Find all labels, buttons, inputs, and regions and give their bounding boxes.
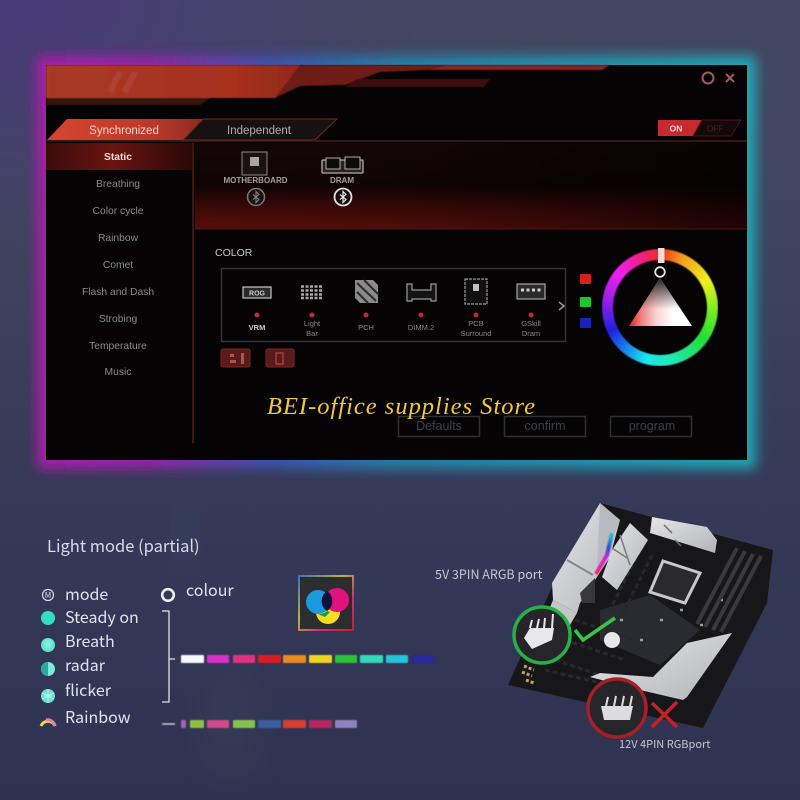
zone: vrm [243, 287, 271, 332]
cross mark [652, 702, 677, 727]
tab: synchronized [47, 119, 203, 140]
shroud dark wedge [580, 578, 595, 603]
small red buttons [221, 349, 294, 367]
static colour strip [181, 655, 434, 663]
zone: pcb surround: PCB [468, 319, 484, 328]
zone: pcb surround [461, 279, 491, 338]
colour legend: colour [186, 577, 234, 601]
icon: motherboard: MOTHERBOARD [224, 176, 288, 185]
sidebar mode list: Flash and Dash [82, 287, 154, 298]
color wheel [602, 248, 718, 366]
action buttons: Defaults [416, 419, 462, 433]
legend item: radar [41, 652, 106, 676]
zone: pch [355, 280, 378, 332]
zone: pch: PCH [358, 323, 374, 332]
zone: vrm: ROG [249, 290, 266, 298]
chipset heatsink [590, 633, 732, 700]
zone: light bar: Bar [306, 329, 318, 338]
sidebar mode list: Breathing [96, 179, 140, 190]
arrow: next [559, 302, 564, 310]
zone: light bar: Light [304, 319, 321, 328]
icon: colour mixing logo [299, 576, 353, 630]
colour legend [162, 577, 234, 601]
action buttons: confirm [525, 419, 565, 433]
sidebar mode list: Temperature [89, 341, 147, 352]
legend item: rainbow: Rainbow [65, 704, 131, 728]
color zone selector [222, 268, 566, 342]
color triangle [629, 278, 692, 326]
tab: independent: Independent [227, 125, 292, 137]
icon: dram [322, 157, 363, 206]
legend item: flicker: flicker [65, 677, 112, 701]
zone: gskill dram: GSkill [521, 319, 541, 328]
shroud foot [548, 600, 577, 625]
zone: light bar [301, 286, 322, 338]
legend item: radar: radar [65, 652, 106, 676]
bracket [162, 611, 175, 702]
zone: gskill dram [517, 284, 545, 338]
rgb glow behind screen [37, 56, 756, 469]
sidebar mode list: Comet [103, 260, 133, 271]
green callout: argb port [514, 607, 570, 663]
on off toggle: ON [670, 124, 682, 134]
legend item: flicker [41, 677, 112, 703]
icon: dram: DRAM [330, 176, 354, 185]
legend item: breath: Breath [65, 628, 115, 652]
legend item: breath [41, 628, 115, 652]
action buttons: program [629, 419, 675, 433]
ram slots [697, 548, 761, 632]
device panel [195, 143, 747, 229]
software screen panel [46, 65, 747, 460]
sidebar mode list [46, 143, 192, 378]
zone: vrm: VRM [249, 323, 265, 332]
vrm heatsink [602, 523, 648, 590]
legend item: mode: M [45, 590, 51, 601]
legend item: steady on: Steady on [65, 604, 139, 628]
rgb channel squares [580, 274, 591, 328]
tab: independent [183, 119, 337, 140]
io contacts [522, 666, 534, 683]
motherboard illustration [508, 503, 773, 737]
io shroud [552, 503, 620, 613]
on off toggle: OFF [707, 124, 723, 134]
sidebar mode list: Music [105, 367, 131, 378]
top red banner [46, 65, 610, 105]
zone: dimm.2 [407, 284, 436, 332]
sidebar mode list: Color cycle [93, 206, 144, 217]
label: rgb port: 12V 4PIN RGBport [619, 736, 710, 752]
window refresh and close icons [702, 72, 734, 84]
board body [508, 503, 773, 728]
rainbow colour strip [162, 720, 357, 728]
sidebar mode list: Static [104, 152, 132, 163]
zone: gskill dram: Dram [522, 329, 540, 338]
zone: dimm.2: DIMM.2 [408, 323, 434, 332]
red callout: rgb port [588, 679, 646, 737]
rgb light strip [596, 533, 612, 574]
zone: pcb surround: Surround [461, 329, 491, 338]
sidebar mode list: Strobing [99, 314, 137, 325]
heading: light mode: Light mode (partial) [47, 533, 200, 557]
sidebar mode list: Rainbow [98, 233, 139, 244]
color label: COLOR [215, 247, 253, 259]
legend item: mode: mode [65, 581, 108, 605]
label: argb port: 5V 3PIN ARGB port [435, 564, 543, 583]
action buttons [398, 416, 692, 436]
top heatsink [650, 517, 717, 553]
icon: motherboard [224, 152, 288, 206]
watermark: store name: BEI-office supplies Store [267, 393, 535, 420]
on off toggle [658, 120, 741, 136]
tab: synchronized: Synchronized [89, 125, 159, 137]
cpu socket [650, 561, 700, 603]
board traces [545, 550, 723, 684]
cmos battery [604, 632, 620, 648]
legend item: mode [42, 581, 108, 605]
check mark [575, 618, 615, 640]
mode legend [41, 581, 139, 728]
